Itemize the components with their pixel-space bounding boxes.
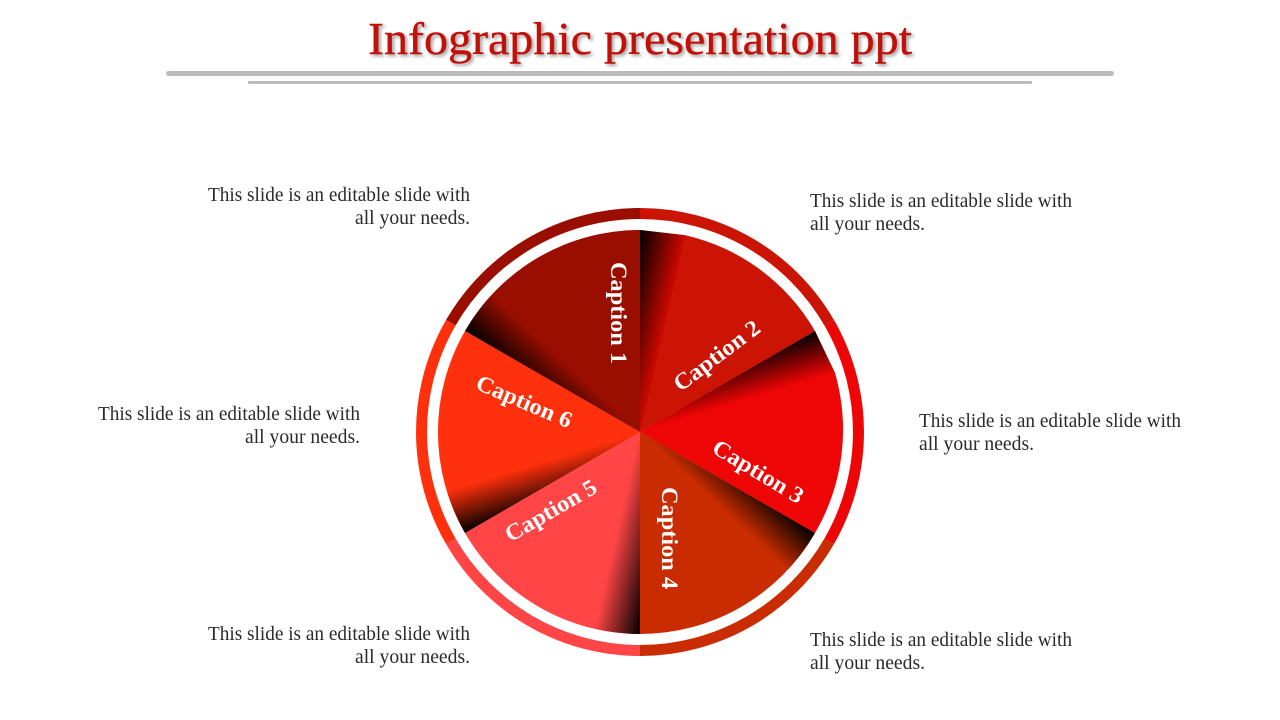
text block: bottom right bbox=[810, 629, 1072, 674]
caption 2: Caption 2 bbox=[668, 315, 765, 396]
caption 3: Caption 3 bbox=[708, 435, 808, 509]
text block: bottom left: all your needs. bbox=[355, 646, 470, 668]
text block: bottom right: all your needs. bbox=[810, 652, 925, 674]
title: Infographic presentation ppt bbox=[368, 13, 912, 64]
text block: middle left: This slide is an editable slide with bbox=[98, 403, 360, 425]
caption 4: Caption 4 bbox=[657, 487, 682, 590]
text block: top left: all your needs. bbox=[355, 207, 470, 229]
text block: top right: This slide is an editable slide with bbox=[810, 190, 1072, 212]
text block: bottom right: This slide is an editable slide with bbox=[810, 629, 1072, 651]
text block: middle left bbox=[98, 403, 360, 448]
pie chart bbox=[438, 230, 843, 634]
text block: bottom left: This slide is an editable slide with bbox=[208, 623, 470, 645]
text block: middle right: all your needs. bbox=[919, 433, 1034, 455]
caption 6: Caption 6 bbox=[472, 370, 576, 433]
text block: top left bbox=[208, 184, 470, 229]
caption 5: Caption 5 bbox=[500, 474, 601, 547]
sector: caption 6 bbox=[438, 331, 640, 533]
sector: caption 1 bbox=[465, 230, 640, 432]
segmented outer ring bbox=[422, 214, 858, 650]
caption 1: Caption 1 bbox=[606, 262, 631, 364]
text block: middle left: all your needs. bbox=[245, 426, 360, 448]
sector: caption 2 bbox=[640, 230, 815, 432]
text block: top left: This slide is an editable slide with bbox=[208, 184, 470, 206]
text block: top right bbox=[810, 190, 1072, 235]
title underline bbox=[166, 71, 1114, 84]
text block: middle right bbox=[919, 410, 1181, 455]
text block: top right: all your needs. bbox=[810, 213, 925, 235]
text block: bottom left bbox=[208, 623, 470, 668]
sector: caption 3 bbox=[640, 331, 843, 533]
sector: caption 5 bbox=[465, 432, 640, 634]
sector: caption 4 bbox=[640, 432, 815, 634]
text block: middle right: This slide is an editable slide with bbox=[919, 410, 1181, 432]
